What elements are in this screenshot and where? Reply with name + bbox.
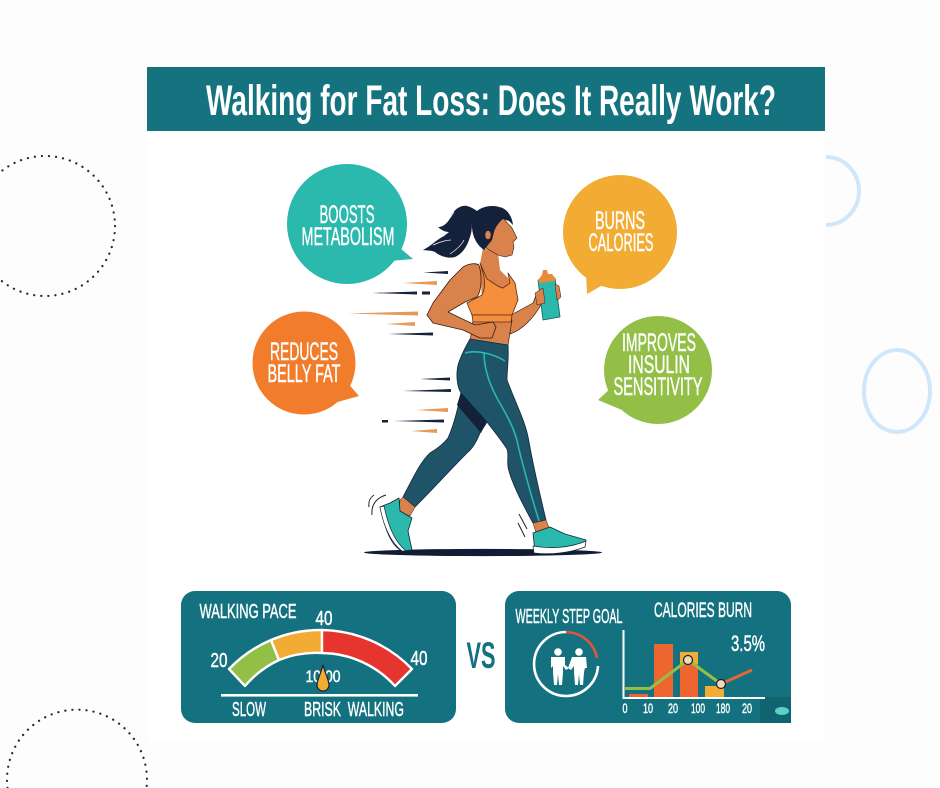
ground shadow — [364, 549, 602, 556]
gauge baseline — [221, 694, 418, 697]
ear — [485, 230, 491, 240]
decoration: dotted circle left — [0, 156, 115, 296]
torso skin — [470, 320, 512, 345]
chart axes — [624, 630, 765, 698]
trend line — [625, 660, 721, 688]
corner badge — [760, 697, 791, 723]
decoration: light blue arc — [826, 157, 859, 225]
shoe sole — [533, 541, 586, 554]
callout: boosts metabolism — [287, 164, 413, 284]
back shoe sole — [380, 506, 406, 551]
callout: reduces belly fat: BELLY FAT — [268, 360, 340, 388]
x-axis labels: 10 — [643, 700, 653, 716]
title banner — [147, 67, 825, 131]
VS label: VS — [466, 635, 496, 676]
callout: boosts metabolism: METABOLISM — [302, 223, 394, 251]
callout: reduces belly fat: REDUCES — [270, 338, 338, 366]
sports bra — [467, 263, 518, 315]
callout: reduces belly fat — [252, 312, 359, 414]
labels: slow, brisk walking: SLOW — [232, 699, 266, 721]
gauge labels: 20 — [210, 650, 228, 672]
decoration: dotted circle bottom — [7, 710, 147, 788]
gauge labels: 40 — [410, 648, 428, 670]
gauge labels: 10 00 — [306, 667, 340, 686]
callout: burns calories: BURNS — [595, 207, 645, 235]
legging stripe — [465, 352, 539, 521]
gauge labels: 40 — [316, 608, 332, 630]
face — [486, 218, 517, 257]
x-axis labels: 180 — [716, 700, 730, 716]
x-axis labels: 0 — [622, 700, 628, 716]
gauge needle — [317, 665, 329, 691]
x-axis labels: 20 — [742, 700, 752, 716]
x-axis labels — [622, 700, 752, 716]
callout: burns calories — [563, 175, 677, 294]
labels: slow, brisk walking: BRISK WALKING — [304, 699, 404, 721]
callout: improves insulin sensitivity: SENSITIVITY — [614, 373, 703, 401]
neck and chest — [480, 248, 514, 300]
front shoe — [533, 527, 586, 553]
trend line end — [721, 670, 752, 684]
water bottle — [535, 270, 561, 320]
heading: walking pace: WALKING PACE — [200, 601, 296, 623]
callout: boosts metabolism: BOOSTS — [320, 201, 374, 229]
marker — [684, 656, 692, 664]
panel: weekly steps and calories — [505, 591, 791, 723]
back leg — [403, 393, 487, 507]
callout: burns calories: CALORIES — [588, 229, 654, 257]
callout: improves insulin sensitivity — [598, 316, 712, 424]
hair highlights — [433, 212, 464, 254]
back ankle — [399, 497, 415, 516]
gauge labels — [210, 608, 428, 686]
bottle hand — [535, 284, 561, 305]
walking woman figure — [364, 206, 602, 556]
value: 3.5%: 3.5% — [731, 631, 765, 656]
back shoe — [380, 498, 412, 551]
callout: improves insulin sensitivity: INSULIN — [628, 351, 690, 379]
heading: calories burn: CALORIES BURN — [654, 599, 752, 622]
near arm — [427, 264, 496, 338]
bar chart — [624, 630, 765, 698]
decoration: light blue ellipse — [864, 350, 930, 432]
speed lines — [348, 271, 451, 433]
progress ring — [534, 632, 598, 696]
x-axis labels: 20 — [668, 700, 678, 716]
heading: weekly step goal: WEEKLY STEP GOAL — [516, 606, 622, 628]
icon: two people — [551, 648, 587, 685]
marker — [716, 680, 726, 688]
panel: walking pace — [181, 591, 456, 723]
hair — [423, 206, 513, 258]
callout: improves insulin sensitivity: IMPROVES — [622, 329, 696, 357]
bra band — [472, 315, 512, 322]
far arm — [510, 284, 560, 334]
front ankle — [533, 520, 550, 536]
thigh shadow — [457, 392, 487, 433]
gauge arc — [229, 630, 412, 686]
x-axis labels: 100 — [691, 700, 705, 716]
labels: slow, brisk walking — [232, 699, 404, 721]
front leg and hips — [457, 339, 546, 523]
motion ticks — [369, 495, 527, 537]
